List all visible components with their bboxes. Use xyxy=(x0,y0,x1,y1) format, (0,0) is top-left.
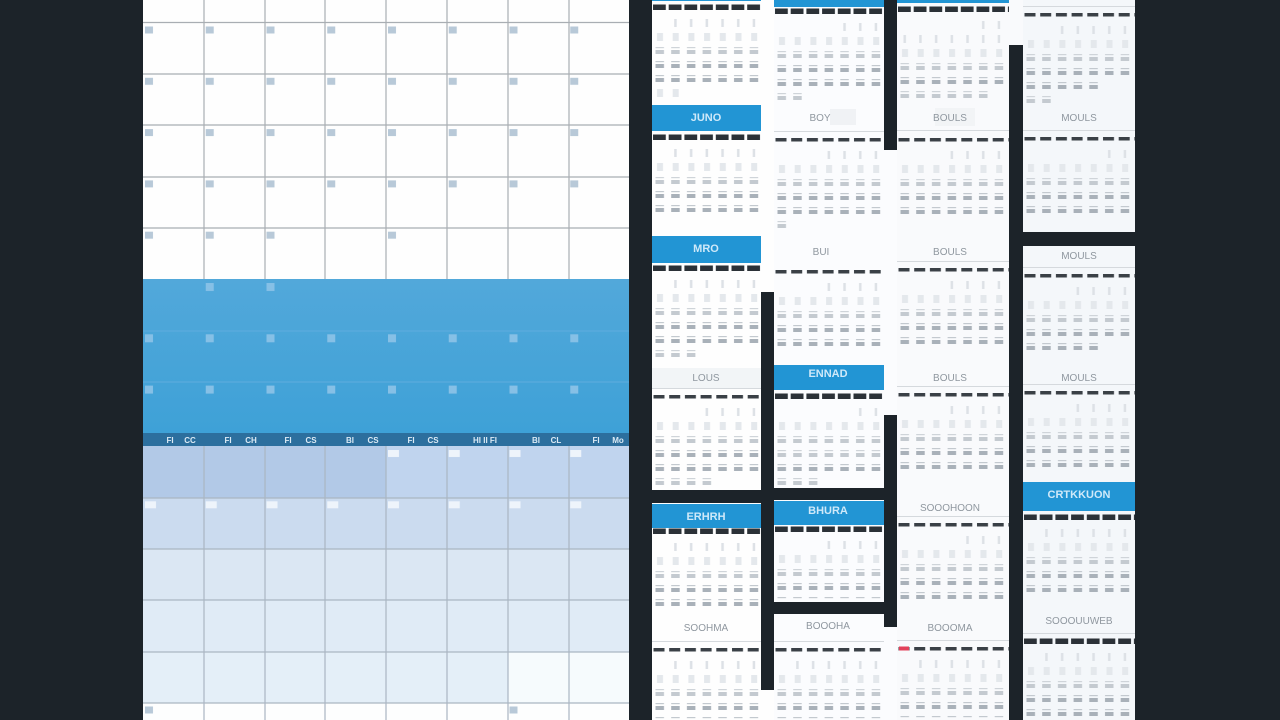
month title: BUI xyxy=(813,247,829,258)
month title: SOOOHOON xyxy=(920,503,980,514)
month grid xyxy=(652,388,761,491)
panel: column 1 of month sheets xyxy=(652,0,774,720)
blue month header: MRO xyxy=(693,243,719,255)
month title: BOY xyxy=(809,113,831,124)
date markers in white rows xyxy=(143,22,629,244)
month grid xyxy=(1023,267,1135,356)
month grid xyxy=(774,641,884,720)
blue highlighted rows xyxy=(143,279,629,433)
month title: SOOOUUWEB xyxy=(1045,616,1113,627)
month grid xyxy=(897,261,1009,350)
blue month header: CRTKKUON xyxy=(1048,489,1111,501)
month grid xyxy=(652,528,761,612)
blue month header xyxy=(774,501,884,525)
month grid xyxy=(897,6,1009,104)
dark weekday band: CS xyxy=(305,436,317,445)
month grid xyxy=(652,4,761,102)
blue month header xyxy=(652,236,761,263)
dark weekday band: FI xyxy=(407,436,415,445)
sheet background xyxy=(774,0,897,720)
blue month header: ERHRH xyxy=(686,511,726,523)
dark weekday band: FI xyxy=(592,436,600,445)
panel: large calendar xyxy=(143,0,629,720)
month title: BOULS xyxy=(933,247,967,258)
month grid xyxy=(1023,633,1135,720)
month title: BOOOHA xyxy=(806,621,850,632)
dark weekday band: Mo xyxy=(612,436,624,445)
dark weekday band: FI xyxy=(224,436,232,445)
month title xyxy=(809,109,856,125)
month grid xyxy=(774,8,884,106)
month title: MOULS xyxy=(1061,373,1097,384)
month title: BOULS xyxy=(933,373,967,384)
panel: column 4 of month sheets xyxy=(1023,0,1135,720)
sheet background xyxy=(652,0,774,720)
month title xyxy=(652,368,761,388)
dark weekday band: CL xyxy=(551,436,561,445)
month grid xyxy=(1023,6,1135,109)
top band xyxy=(652,0,761,1)
blue month header xyxy=(1023,482,1135,511)
dark weekday band: CC xyxy=(184,436,196,445)
month grid xyxy=(774,268,884,352)
panel: column 2 of month sheets xyxy=(774,0,897,720)
white calendar rows xyxy=(143,0,629,279)
blue month header xyxy=(652,105,761,131)
month grid xyxy=(652,641,761,720)
dark weekday band: BI xyxy=(346,436,354,445)
dark weekday band: FI xyxy=(284,436,292,445)
dark weekday band: FI xyxy=(166,436,174,445)
dark weekday band: CS xyxy=(367,436,379,445)
pale blue rows xyxy=(143,446,629,720)
month grid xyxy=(774,131,884,234)
month grid xyxy=(1023,130,1135,219)
month title: SOOHMA xyxy=(684,623,729,634)
dark weekday band: HI II FI xyxy=(473,436,497,445)
month grid xyxy=(897,130,1009,220)
month grid xyxy=(897,386,1009,475)
blue month header xyxy=(652,504,761,528)
blue month header: BHURA xyxy=(808,505,848,517)
month title: BOULS xyxy=(933,113,967,124)
month grid xyxy=(652,134,761,218)
panel: column 3 of month sheets xyxy=(897,0,1023,720)
blue month header: ENNAD xyxy=(808,368,848,380)
blue month header xyxy=(774,365,884,390)
dark weekday band: BI xyxy=(532,436,540,445)
dark weekday band xyxy=(143,433,629,446)
month grid xyxy=(1023,514,1135,598)
month grid xyxy=(897,516,1009,605)
top blue header xyxy=(897,0,1009,3)
month grid xyxy=(774,526,884,600)
dark weekday band: CH xyxy=(245,436,257,445)
top blue header xyxy=(774,0,884,7)
month grid xyxy=(652,265,761,363)
month title xyxy=(933,108,975,126)
month title: BOOOMA xyxy=(927,623,973,634)
sheet background xyxy=(1023,0,1135,720)
month title: MOULS xyxy=(1061,251,1097,262)
dark weekday band: CS xyxy=(427,436,439,445)
sheet background xyxy=(897,0,1023,720)
month grid xyxy=(897,640,1009,719)
month grid xyxy=(1023,384,1135,473)
calendar grid lines xyxy=(143,0,629,720)
month grid xyxy=(774,393,884,491)
month title: MOULS xyxy=(1061,113,1097,124)
blue month header: JUNO xyxy=(691,112,722,124)
month title: LOUS xyxy=(692,373,720,384)
